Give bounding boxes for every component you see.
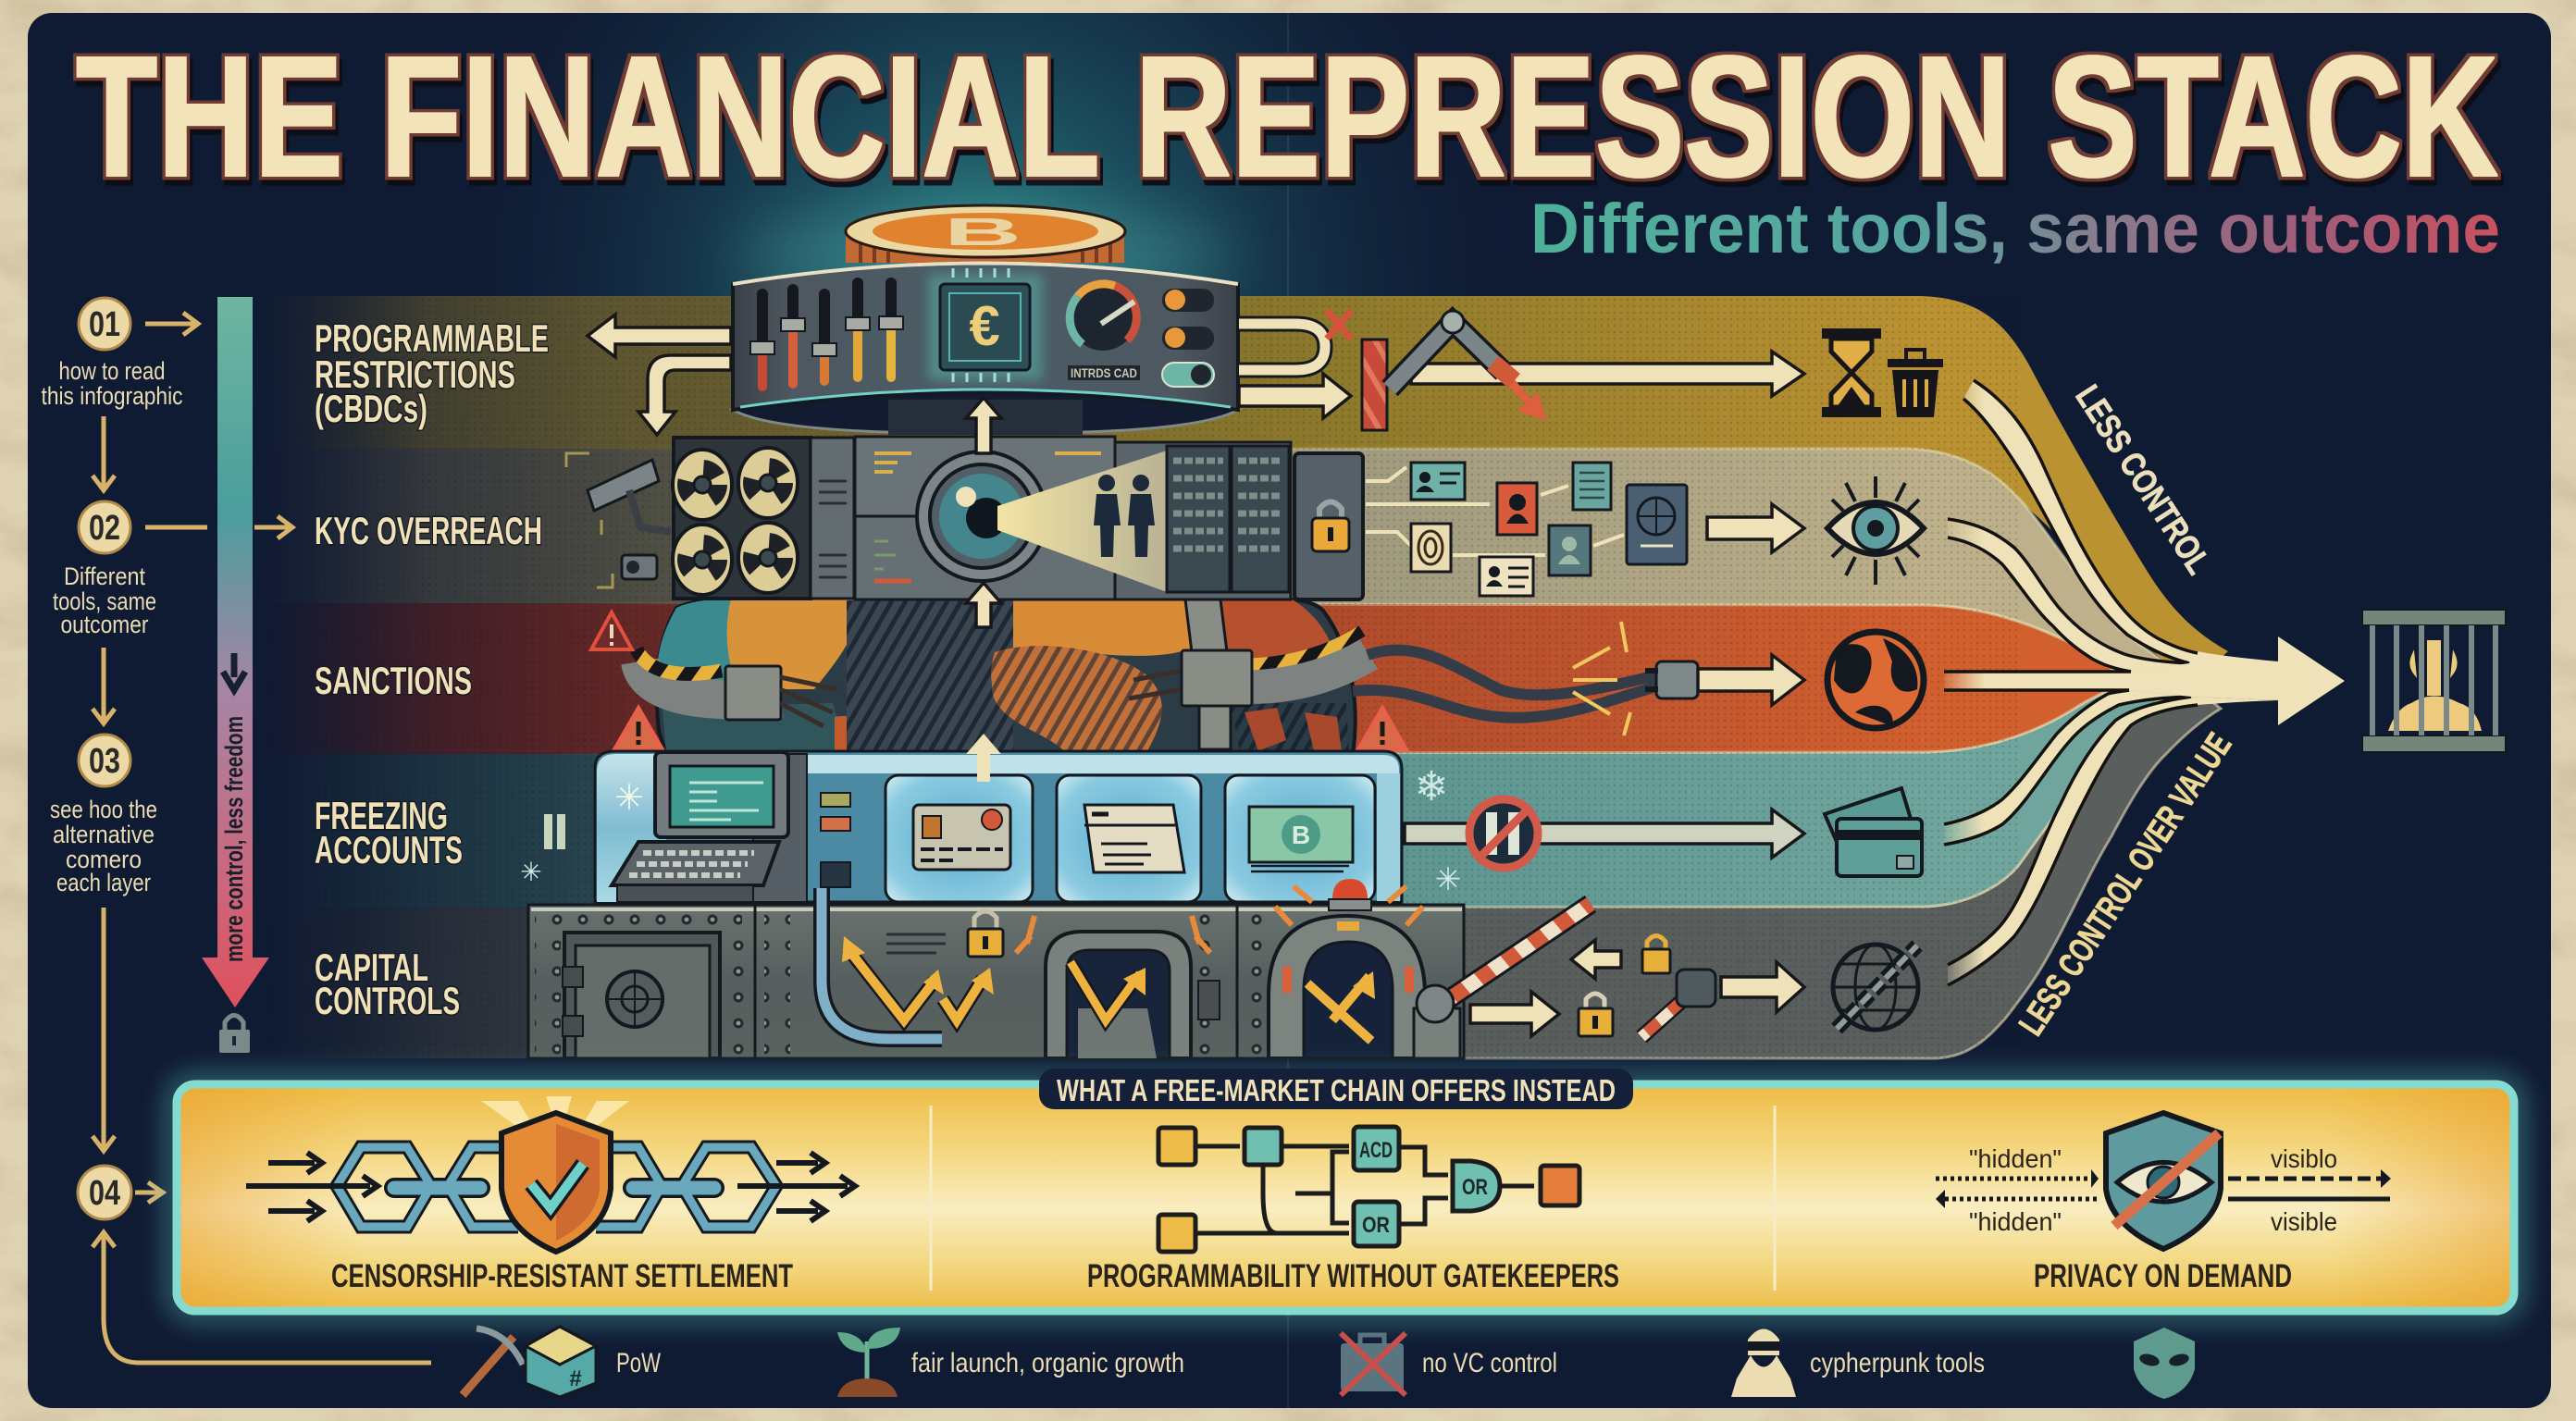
icon: pause bars [544, 814, 565, 849]
icon: chained globe [1833, 945, 1918, 1030]
icon: small down arrow [223, 653, 245, 690]
disc body [733, 263, 1238, 410]
layer labels [315, 316, 549, 1022]
alternative panel [177, 1069, 2514, 1311]
frozen panel: document [1057, 775, 1201, 902]
loop connector and rejected x [1239, 311, 1351, 370]
icon: broken globe [1827, 632, 1924, 728]
red stop barrier [1362, 340, 1387, 430]
subtitle: Different tools, same outcome [1530, 190, 2500, 268]
gauge [1070, 284, 1136, 351]
light beam [997, 451, 1167, 592]
fingerprint [1411, 524, 1451, 572]
cables [1353, 650, 1656, 718]
band: programmable restrictions [263, 296, 2228, 683]
arrow: KYC output [1707, 504, 1804, 552]
column housing [753, 754, 807, 902]
freezing decorations: ❄ [1415, 764, 1448, 809]
id card teal [1411, 463, 1465, 500]
arrow: disc left [588, 315, 731, 357]
step 02 [53, 501, 292, 638]
text: cypherpunk tools: cypherpunk tools [1810, 1348, 1985, 1378]
divider [931, 1106, 1775, 1291]
bitcoin coin [846, 205, 1125, 263]
label: less control over value: LESS CONTROL OVER VALUE [2012, 726, 2239, 1043]
belt right [1249, 652, 1368, 685]
document [1573, 463, 1611, 510]
step 04: 04 [89, 1174, 120, 1213]
euro chip: € [969, 295, 1000, 357]
label: capital controls: CAPITAL [315, 945, 428, 989]
icon: security camera [566, 453, 671, 587]
silhouettes [1094, 475, 1155, 557]
machine layer: capital controls [528, 879, 1464, 1058]
arrow: 02 to 03 [93, 648, 115, 723]
warning triangles [591, 612, 1406, 749]
icon: watchful eye [1827, 476, 1924, 585]
step 03 [50, 735, 157, 896]
muted id [1549, 525, 1591, 575]
header pill [1039, 1069, 1633, 1109]
step 02: Different [64, 562, 145, 590]
lower right patches [1231, 703, 1349, 752]
prisoner [2388, 696, 2482, 731]
frayed wires [780, 671, 1182, 726]
step 03: 03 [89, 742, 120, 781]
toggles [1162, 289, 1214, 387]
arrow: freezing [1405, 809, 1804, 858]
icon: lock lower [1579, 994, 1613, 1036]
server rack [1167, 446, 1289, 592]
icon: lock upper [1642, 936, 1670, 973]
icon: bank cards [1825, 788, 1922, 876]
passport [1627, 485, 1687, 564]
converging output strips [1944, 380, 2278, 985]
text: fair launch: fair launch, organic growth [911, 1348, 1184, 1378]
arrow: return loop [93, 1232, 431, 1363]
tape reels [673, 448, 798, 595]
safe door [563, 933, 720, 1058]
text: PoW: PoW [616, 1348, 662, 1378]
big output arrow [2129, 636, 2345, 725]
server padlock [1312, 501, 1349, 551]
document links [1366, 467, 1624, 555]
upper continent [1006, 599, 1194, 656]
privacy shield [2106, 1113, 2221, 1249]
pipe [822, 888, 942, 1039]
chain links [337, 1147, 776, 1227]
column: censorship-resistant settlement [246, 1096, 855, 1294]
teal ocean [657, 599, 740, 703]
step 03: alternative [53, 821, 155, 848]
hidden labels: "hidden" [1969, 1144, 2062, 1173]
column: privacy on demand: visible [2271, 1207, 2337, 1236]
shield check [502, 1113, 611, 1252]
icon: alien mask [2134, 1328, 2195, 1399]
left column: how to read steps [41, 298, 431, 1363]
label: programmable restrictions: PROGRAMMABLE [315, 316, 549, 360]
arrow: sanctions [1698, 655, 1804, 705]
step 02: outcomer [61, 611, 148, 638]
hatched africa [991, 646, 1162, 751]
machine layer: programmable disc [733, 205, 1238, 435]
hatched central ocean [847, 600, 1013, 752]
caption: CENSORSHIP-RESISTANT SETTLEMENT [331, 1258, 793, 1294]
step 01: 01 [89, 305, 120, 344]
KYC document icons [1366, 463, 1687, 596]
arrow: 01 to 02 [93, 416, 115, 490]
caption: PROGRAMMABILITY WITHOUT GATEKEEPERS [1087, 1258, 1619, 1294]
band grain [263, 296, 2021, 1058]
column: privacy on demand [1936, 1113, 2391, 1294]
belt left [640, 661, 782, 700]
arrow: capital controls back [1571, 940, 1621, 979]
step 03: see hoo the [50, 796, 157, 823]
stacked flow bands [263, 296, 2228, 1058]
coin halo [736, 208, 1235, 301]
control box [1198, 981, 1220, 1019]
freezing decorations [520, 764, 1461, 897]
arrow: capital controls in [1470, 992, 1559, 1036]
step 03: each layer [56, 869, 151, 896]
caption: PRIVACY ON DEMAND [2034, 1258, 2292, 1294]
icon: padlock [219, 1016, 250, 1053]
icon: no VC [1341, 1333, 1406, 1395]
frozen panel: banknote [1225, 775, 1375, 902]
barrier arm [1414, 904, 1591, 1058]
icon: jail cell [2362, 610, 2506, 752]
icon: cypherpunk [1731, 1328, 1796, 1397]
arch gate one [1016, 916, 1210, 1058]
control gradient arrow [202, 297, 269, 1007]
status lights [821, 793, 850, 807]
band: capital controls [263, 686, 2221, 1058]
arrow: capital controls out [1721, 962, 1804, 1012]
label: sanctions: SANCTIONS [315, 659, 472, 702]
label: less control: LESS CONTROL [2068, 378, 2218, 581]
logic nodes [1158, 1127, 1579, 1252]
column: privacy on demand: "hidden" [1969, 1207, 2062, 1236]
id with photo [1480, 557, 1533, 596]
column: programmability: OR [1362, 1213, 1390, 1238]
label: freezing accounts: FREEZING [315, 794, 448, 837]
euro chip [928, 268, 1043, 382]
terminal [612, 752, 850, 902]
frozen panel: card [886, 775, 1033, 902]
freezing decorations: ✳ [1435, 862, 1461, 897]
arrow: programmable output [1411, 352, 1804, 396]
footer row [463, 1327, 2195, 1399]
band: KYC overreach [263, 449, 2193, 683]
text: more control, less freedom: more control, less freedom [220, 716, 248, 962]
rays [481, 1096, 629, 1147]
upward flow arrows [966, 398, 1001, 782]
label: KYC overreach: KYC OVERREACH [315, 509, 542, 552]
step 03: comero [66, 846, 142, 873]
icon: plug and spark [1573, 622, 1698, 735]
machine layer: sanctions globe [637, 592, 1656, 754]
gold zig-zag arrows [848, 948, 983, 1020]
step 02: tools, same [53, 587, 156, 615]
step 01: this infographic [41, 382, 183, 410]
flow arrows [246, 1153, 855, 1221]
disc underside [733, 392, 1238, 433]
label: programmable restrictions: RESTRICTIONS [315, 352, 515, 396]
text: no VC control: no VC control [1422, 1348, 1557, 1378]
machine layer: KYC surveillance [673, 437, 1363, 599]
icon: sprout [837, 1328, 900, 1397]
label: freezing accounts: ACCOUNTS [315, 828, 463, 871]
icon: robot arm [1390, 311, 1547, 421]
screen details [874, 453, 1101, 581]
data flows [1936, 1179, 2390, 1199]
arch gate two [1269, 879, 1425, 1058]
icon: pickaxe and cube [463, 1327, 596, 1397]
vertical strap [1184, 592, 1231, 749]
strip ink lines [1974, 380, 2198, 653]
arrow: disc right [1239, 374, 1351, 418]
band: freezing accounts [263, 683, 2193, 908]
icon: pickaxe and cube: # [569, 1366, 582, 1391]
label: freezing accounts [315, 794, 463, 871]
column: programmability: OR [1462, 1175, 1488, 1200]
band: sanctions [263, 603, 2128, 754]
column: programmability: ACD [1359, 1138, 1393, 1163]
icon: hourglass [1822, 328, 1881, 417]
arrow: disc elbow [638, 355, 731, 435]
step 04 [78, 1166, 163, 1219]
header pill: WHAT A FREE-MARKET CHAIN OFFERS INSTEAD [1057, 1073, 1616, 1107]
machine layer: freezing accounts [595, 751, 1402, 902]
freezing decorations: ✳ [520, 858, 542, 886]
arrow: 03 to 04 [93, 908, 115, 1151]
label: programmable restrictions [315, 316, 549, 430]
visible labels: visiblo [2271, 1144, 2337, 1173]
label: capital controls: CONTROLS [315, 979, 460, 1022]
small panel label: INTRDS CAD [1071, 365, 1137, 380]
freezing decorations: ✳ [614, 779, 644, 818]
broken barrier [1641, 970, 1715, 1037]
label: capital controls [315, 945, 460, 1022]
lock [968, 911, 1003, 957]
scanning eye [917, 451, 1046, 581]
column: programmability [1087, 1127, 1619, 1294]
globe base [657, 599, 1356, 754]
logic wires [1195, 1146, 1534, 1233]
label: programmable restrictions: (CBDCs) [315, 387, 427, 430]
step 01: how to read [59, 357, 165, 385]
red photo [1497, 483, 1537, 535]
icon: trash can [1888, 350, 1943, 417]
icon: no pause sign [1469, 799, 1538, 868]
red-orange continent [1184, 599, 1342, 675]
bitcoin coin: B [944, 210, 1022, 253]
gold landmass [727, 599, 858, 689]
step 01 [41, 298, 198, 410]
sliders [750, 283, 903, 387]
frozen panel: banknote: B [1292, 821, 1310, 849]
step 02: 02 [89, 509, 120, 548]
